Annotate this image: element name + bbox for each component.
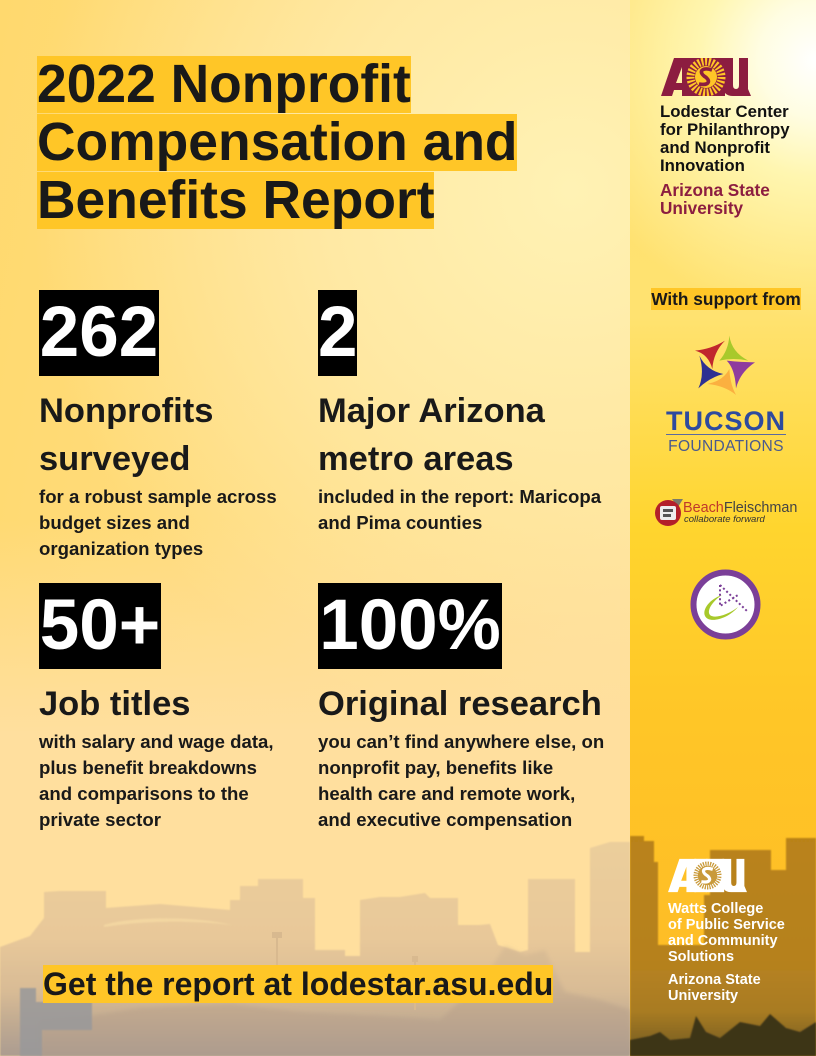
stat heading: Job titles [39, 685, 190, 723]
stat heading: Major Arizona [318, 392, 545, 430]
logo text: Watts College [668, 901, 763, 917]
lamp post [272, 932, 418, 1010]
stat text [318, 486, 602, 533]
stat: 50+ job titles [39, 583, 274, 830]
stat text: private sector [39, 809, 161, 830]
background: lower fade [0, 520, 630, 1056]
icon: badge [655, 499, 683, 526]
sidebar background [630, 0, 816, 1056]
logo university [660, 180, 770, 218]
logo: purple circle [690, 570, 760, 640]
stat text: organization types [39, 538, 203, 559]
logo: BeachFleischman [655, 499, 797, 526]
title: 2022 Nonprofit [37, 55, 411, 114]
support label: With support from [651, 289, 801, 309]
stat text [39, 486, 277, 559]
stat number: 100% [319, 586, 501, 665]
logo text: Solutions [668, 949, 734, 965]
text: Tucson: TUCSON [666, 406, 786, 436]
logo university: Arizona State [668, 972, 761, 988]
sign tower [20, 988, 92, 1056]
skyline: sidebar [630, 835, 816, 1056]
stat text: with salary and wage data, [39, 731, 274, 752]
logo text: and Nonprofit [660, 138, 770, 157]
title: Compensation and [37, 113, 518, 172]
logo: Tucson Foundations [666, 336, 786, 455]
tree line [40, 946, 630, 1056]
stat text: and executive compensation [318, 809, 572, 830]
call to action: Get the report at lodestar.asu.edu [43, 966, 553, 1002]
stat text: included in the report: Maricopa [318, 486, 601, 507]
logo: ASU Watts College [668, 858, 785, 1004]
stat text [318, 731, 604, 830]
logo text [660, 102, 790, 175]
stat number: 50+ [40, 586, 160, 665]
stat text: plus benefit breakdowns [39, 757, 257, 778]
text: tagline: collaborate forward [684, 514, 765, 525]
stat text: for a robust sample across [39, 486, 277, 507]
stat text: and comparisons to the [39, 783, 249, 804]
stat text [39, 731, 274, 830]
title: Benefits Report [37, 171, 435, 230]
logo text: Lodestar Center [660, 102, 789, 121]
background: main panel [0, 0, 630, 1056]
stat text: health care and remote work, [318, 783, 575, 804]
logo university: Arizona State [660, 180, 770, 200]
logo text: for Philanthropy [660, 120, 790, 139]
stat heading: metro areas [318, 440, 514, 478]
stat heading: Original research [318, 685, 602, 723]
logo text: Innovation [660, 156, 745, 175]
logo university: University [668, 988, 738, 1004]
stat: 2 metro areas [318, 290, 602, 533]
stat heading [39, 392, 213, 478]
stat heading [318, 392, 546, 478]
stat: 100% original research [318, 583, 604, 830]
stat text: budget sizes and [39, 512, 190, 533]
skyline: main panel [0, 842, 630, 1056]
stat text: nonprofit pay, benefits like [318, 757, 553, 778]
icon: ASU wordmark white [668, 858, 747, 892]
logo university: University [660, 198, 743, 218]
stat heading: surveyed [39, 440, 191, 478]
logo text: and Community [668, 933, 778, 949]
stat number: 2 [318, 293, 358, 372]
logo: ASU Lodestar [660, 58, 790, 218]
stat number: 262 [40, 293, 158, 372]
icon: ASU wordmark [661, 58, 751, 96]
stat text: you can’t find anywhere else, on [318, 731, 604, 752]
stat heading: Nonprofits [39, 392, 213, 430]
icon: star [695, 336, 755, 395]
stat: 262 nonprofits [39, 290, 277, 559]
arena windows [104, 918, 232, 927]
text: Foundations: FOUNDATIONS [668, 438, 784, 455]
logo text: of Public Service [668, 917, 785, 933]
logo university [668, 972, 761, 1004]
title [37, 55, 518, 230]
logo text [668, 901, 785, 965]
stat text: and Pima counties [318, 512, 482, 533]
text: name: BeachFleischman [683, 500, 797, 516]
